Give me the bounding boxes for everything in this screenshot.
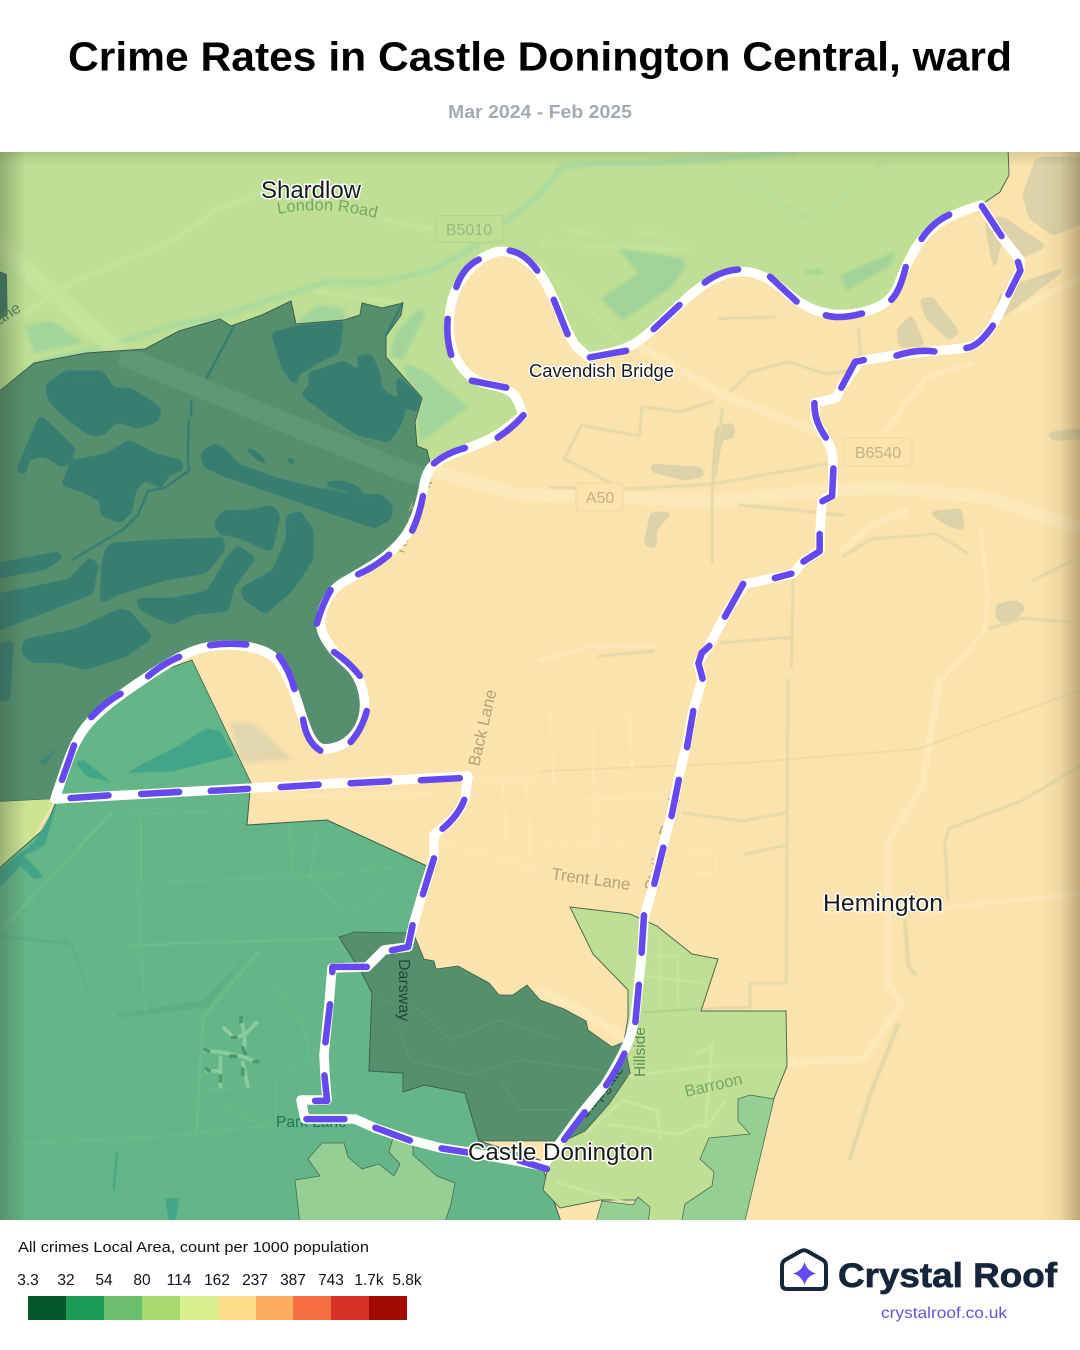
- label: A50: [576, 483, 623, 511]
- legend colour swatches: [28, 1296, 407, 1320]
- label: Cavendish Bridge: Cavendish Bridge: [529, 361, 674, 381]
- website link text: crystalroof.co.uk: [881, 1305, 1008, 1322]
- legend title: All crimes Local Area, count per 1000 population: [18, 1240, 369, 1256]
- legend scale labels: 237: [242, 1272, 268, 1289]
- ward boundary: purple dashes: [62, 206, 1020, 1169]
- label: Trent Lane: Trent Lane: [550, 865, 631, 894]
- legend scale labels: 80: [133, 1272, 151, 1289]
- map edge shading: [0, 152, 1080, 1220]
- mid green area north of boundary line: [55, 660, 252, 799]
- label: Station Road: Station Road: [641, 796, 684, 893]
- label: Shardlow: Shardlow: [261, 177, 362, 204]
- legend: [17, 1240, 422, 1320]
- mid green details: [0, 728, 340, 1220]
- light green area: south east: [543, 907, 787, 1225]
- legend scale labels: 743: [318, 1272, 344, 1289]
- legend scale labels: 162: [204, 1272, 230, 1289]
- label: Hemington: Hemington: [823, 890, 943, 917]
- label: Park Lane: Park Lane: [276, 1114, 347, 1131]
- dark green low crime area: [0, 301, 430, 802]
- title: Crime Rates in Castle Donington Central, ward: [68, 34, 1012, 80]
- legend scale labels: 32: [57, 1272, 75, 1289]
- legend scale labels: 5.8k: [392, 1272, 422, 1289]
- ward boundary: white casing: [55, 205, 1020, 1166]
- label: Castle Donington: Castle Donington: [468, 1139, 653, 1166]
- label: A50: A50: [586, 490, 614, 507]
- icon: house with star: [782, 1250, 826, 1289]
- light green details: [0, 152, 895, 443]
- lakes in dark green area: [0, 269, 427, 701]
- legend scale labels: [17, 1272, 422, 1289]
- label: B5010: [436, 216, 502, 242]
- legend scale labels: 114: [167, 1272, 192, 1289]
- cream area roads, ditches and patches: [231, 157, 1080, 1159]
- main mid green area: [0, 790, 562, 1225]
- logo wordmark: Crystal Roof: [838, 1257, 1058, 1295]
- label: River Trent: River Trent: [391, 476, 436, 555]
- label: Darsway: Darsway: [395, 959, 412, 1021]
- label: Back Lane: Back Lane: [465, 688, 500, 768]
- road labels under the boundary: [0, 198, 912, 1171]
- legend scale labels: 1.7k: [354, 1272, 384, 1289]
- legend scale labels: 54: [95, 1272, 113, 1289]
- label: London Road: London Road: [278, 198, 378, 218]
- label: Hillside: Hillside: [632, 1027, 649, 1077]
- small light green wedge at west edge: [0, 799, 53, 867]
- label: Barroon: Barroon: [683, 1070, 744, 1101]
- subtitle: date range: Mar 2024 - Feb 2025: [448, 102, 632, 122]
- darkest green town area: [339, 932, 630, 1141]
- logo: Crystal Roof: [782, 1250, 1058, 1322]
- light green area north of the river: [0, 147, 1009, 480]
- mid-light green pockets: [295, 1095, 774, 1225]
- label: B5010: B5010: [446, 222, 492, 239]
- light green street details: [557, 942, 781, 1207]
- legend scale labels: 3.3: [17, 1272, 39, 1289]
- legend scale labels: 387: [280, 1272, 306, 1289]
- place labels: [261, 177, 943, 1166]
- label: Clapgate: Clapgate: [575, 1061, 628, 1122]
- label: B6540: [844, 438, 912, 466]
- label: B6540: B6540: [855, 445, 901, 462]
